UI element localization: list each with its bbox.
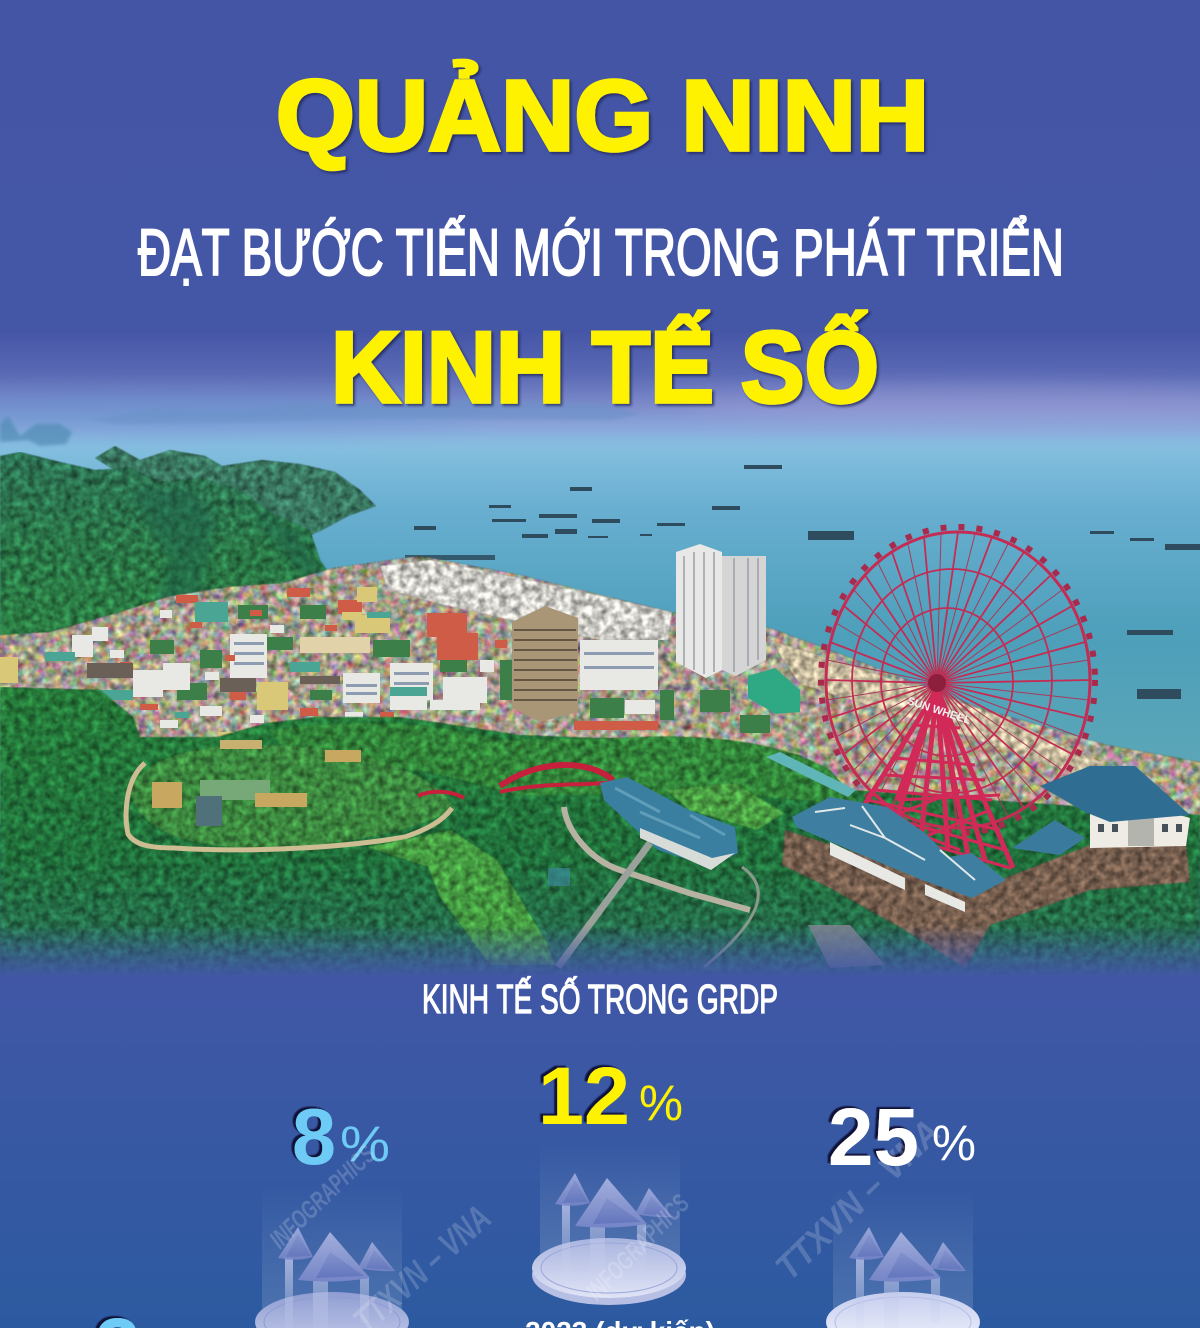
town buildings: [0, 587, 770, 738]
sky haze: [0, 330, 1200, 455]
small karst islands: [0, 416, 72, 446]
title: Quang Ninh: QUẢNG NINH: [276, 59, 929, 172]
wheel legs: [860, 690, 1013, 868]
castle: [782, 766, 1190, 968]
teal roofs: [45, 602, 427, 718]
rising arrows: [849, 1227, 966, 1328]
disk ring: [541, 1243, 677, 1293]
dark structure: [87, 663, 340, 692]
construction site green: [748, 668, 800, 714]
forest ground: [0, 687, 1200, 975]
blue hall roof: [1040, 766, 1190, 822]
column: 25 percent: [826, 1092, 980, 1328]
distant islands: [90, 398, 640, 424]
glow: [833, 1190, 973, 1328]
rear tower roof: [1012, 820, 1085, 855]
mountain shadows: [130, 490, 330, 620]
red fish bridge: [418, 765, 613, 798]
sand yard: [300, 637, 370, 653]
aerial photo of Ha Long: [0, 330, 1200, 985]
rising arrows: [278, 1227, 395, 1328]
ships: [414, 465, 1200, 699]
white blocks: [72, 610, 658, 728]
tree clusters near the town: [270, 723, 860, 805]
title: Kinh te so: KINH TẾ SỐ: [331, 312, 879, 424]
left mountain: [0, 452, 340, 650]
disk side: [532, 1245, 686, 1305]
watermark: agency right: TTXVN – VNA: [767, 1111, 948, 1288]
disk ring: [835, 1297, 971, 1328]
sign: SUN WHEEL: [906, 695, 972, 727]
value: 25: [828, 1092, 919, 1183]
town: [0, 556, 1200, 840]
bottom fade: [0, 925, 1200, 985]
harbour boats: [405, 555, 495, 560]
wheel rim: [826, 532, 1090, 828]
rising arrows: [555, 1173, 672, 1276]
column: 8 percent: [255, 1092, 409, 1328]
back ridge: [95, 446, 376, 540]
lattice: [862, 712, 1010, 868]
watermark: infographics left: INFOGRAPHICS: [263, 1139, 382, 1254]
lilac haze on the right: [680, 387, 1200, 423]
glow: [540, 1145, 680, 1265]
red roofs: [120, 588, 658, 730]
spokes: [826, 532, 1090, 828]
percent sign: %: [932, 1115, 976, 1171]
watermarks: [263, 1111, 948, 1328]
gondolas: [821, 527, 1095, 833]
disk: [826, 1292, 980, 1328]
park with ring path: [126, 740, 455, 850]
section heading: KINH TẾ SỐ TRONG GRDP: [422, 976, 778, 1022]
glow: [262, 1185, 402, 1328]
hall facade pattern: [1128, 812, 1154, 846]
light lawn: [666, 783, 784, 830]
teal roof strip: [766, 752, 856, 797]
promenade: [770, 640, 1105, 778]
white trim: [830, 842, 965, 912]
extra spokes: [827, 533, 1089, 826]
tree clumps: [150, 605, 770, 733]
white hall: [1090, 790, 1190, 848]
castle walls: [782, 830, 1190, 968]
clay court: [808, 925, 885, 968]
value: 8: [292, 1092, 336, 1181]
hub: [928, 674, 946, 692]
percent sign: %: [639, 1075, 683, 1131]
hall windows: [1098, 824, 1182, 832]
grass strip: [367, 830, 555, 965]
value: 12: [538, 1051, 630, 1142]
blue-grey windows: [234, 642, 654, 695]
roof ridges: [815, 806, 975, 880]
middle ring: [881, 608, 1013, 756]
disk ring: [264, 1297, 400, 1328]
ferris wheel: [821, 527, 1095, 868]
walkways and rails: [558, 807, 758, 967]
inner rings: [852, 569, 1052, 793]
front roofs: [792, 797, 1006, 898]
white row houses: [380, 560, 672, 640]
white tower: [676, 544, 766, 678]
watermark: infographics centre: INFOGRAPHICS: [580, 1188, 695, 1306]
disk: [255, 1292, 409, 1328]
temple: [548, 777, 738, 886]
column: 12 percent: [525, 1051, 715, 1328]
yellow facades: [0, 587, 390, 738]
blue haze on the left: [0, 394, 480, 430]
sea: [0, 405, 1200, 825]
construction tower: [512, 606, 578, 722]
disk: [532, 1238, 686, 1298]
percent sign: %: [340, 1116, 390, 1172]
